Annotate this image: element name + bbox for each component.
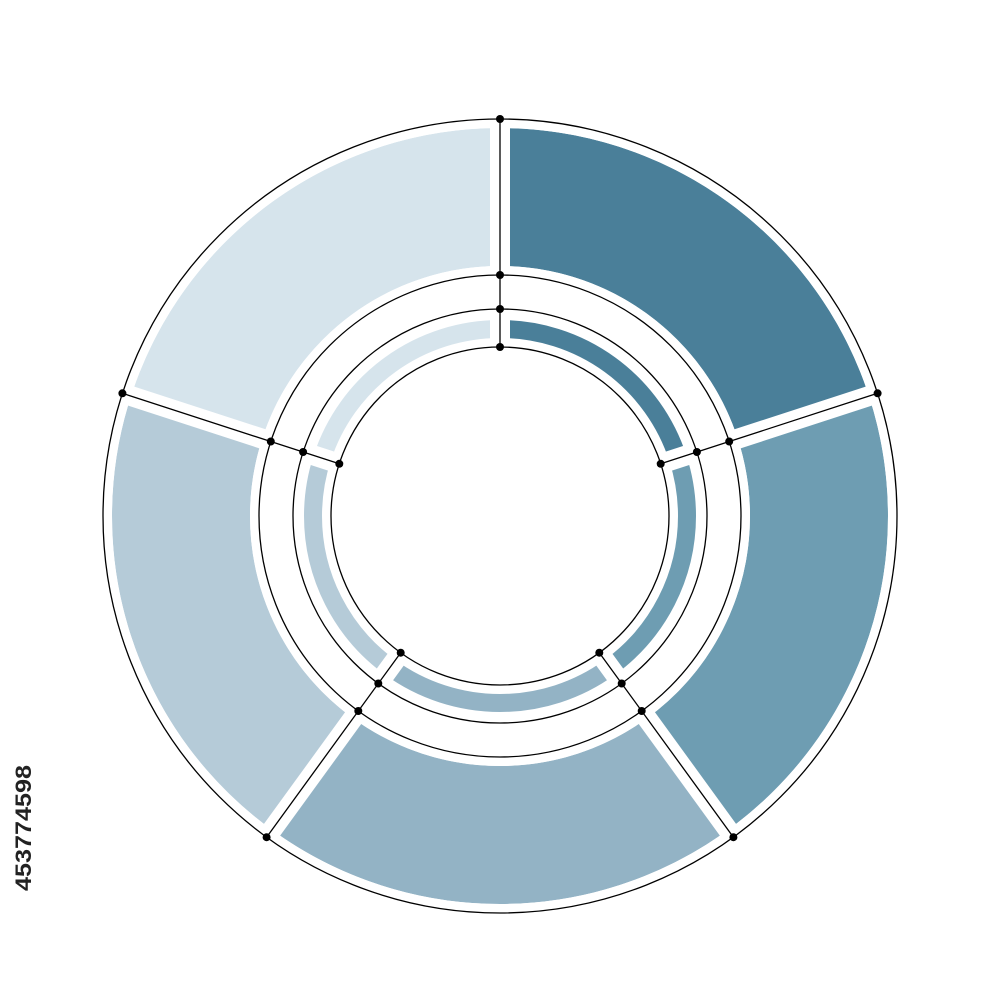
outer ring segments [181,197,819,835]
donut chart [103,115,897,913]
watermark id text: 453774598 [11,765,36,891]
inner ring segments [313,329,687,703]
black outlines [103,119,897,913]
boundary dots [118,115,882,841]
white separators [107,119,893,909]
